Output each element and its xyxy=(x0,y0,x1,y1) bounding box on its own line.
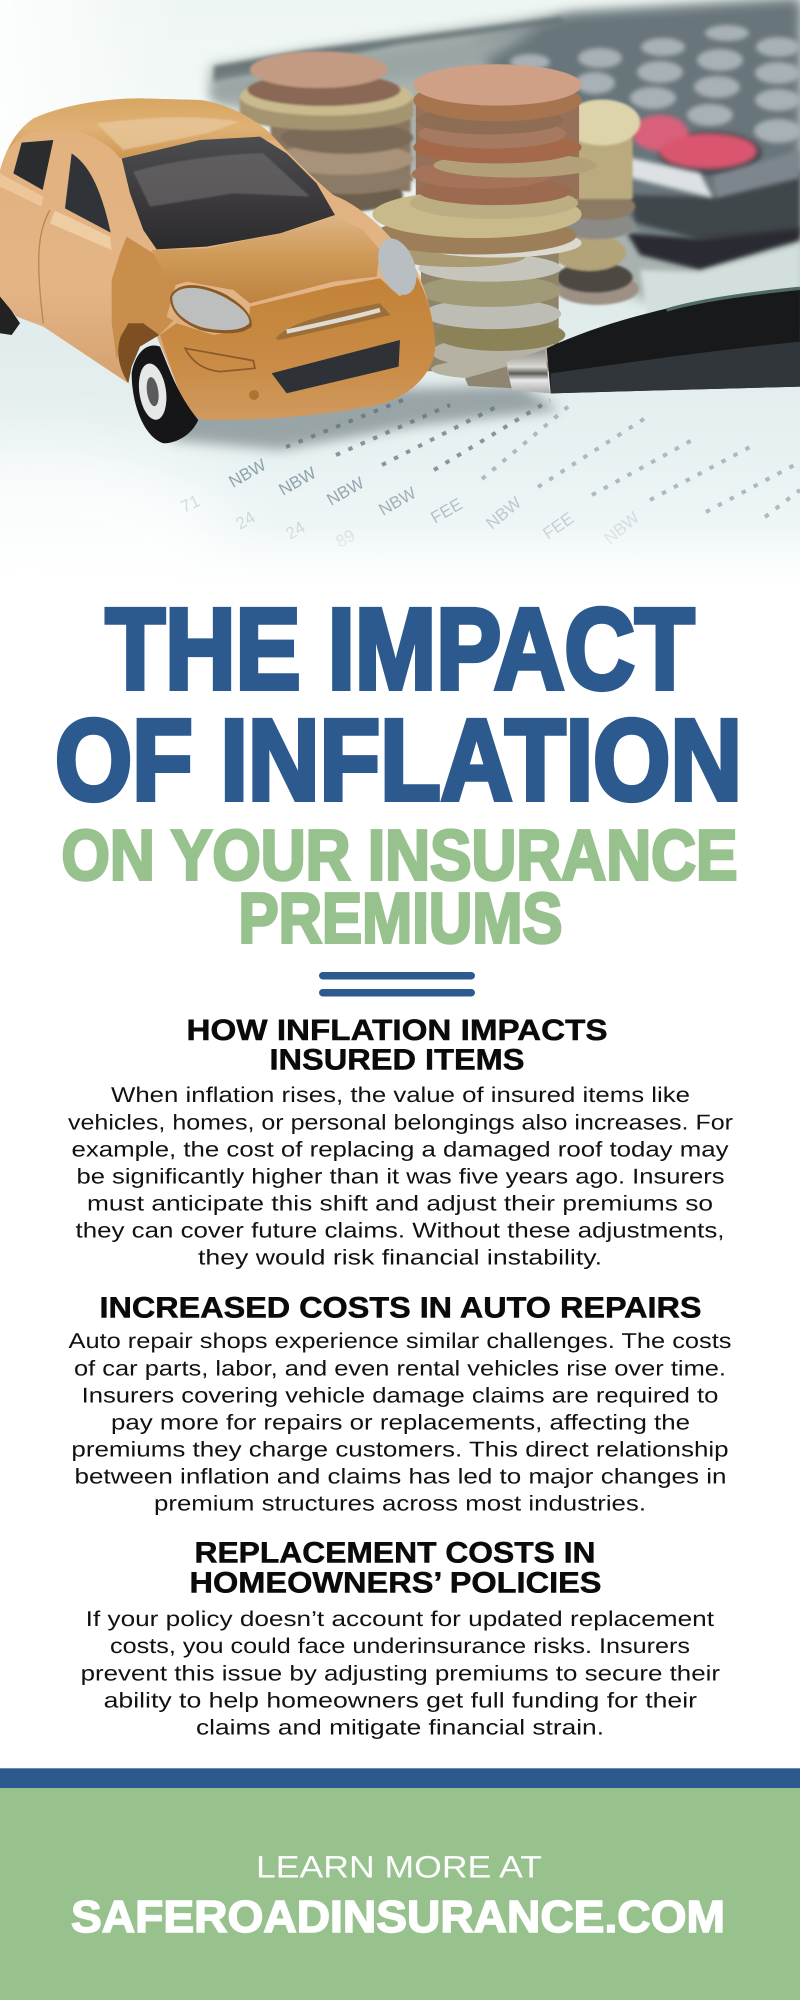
body text: increased costs in auto repairs: of car parts, labor, and even rental vehicles rise over time. xyxy=(74,1356,726,1380)
car windshield xyxy=(122,137,335,249)
coins: back right stack xyxy=(553,100,640,305)
car front wheel xyxy=(132,345,198,443)
body text: replacement costs in homeowners' policies: costs, you could face underinsurance risks. Insurers xyxy=(110,1634,690,1658)
body text: how inflation impacts insured items xyxy=(68,1083,733,1270)
paper shading and printed rows xyxy=(0,0,800,630)
body text: increased costs in auto repairs xyxy=(68,1329,732,1516)
body text: increased costs in auto repairs: premium structures across most industries. xyxy=(154,1492,646,1516)
car body xyxy=(0,98,435,420)
paper shading and printed rows: NBW xyxy=(376,483,419,519)
body text: how inflation impacts insured items: they would risk financial instability. xyxy=(198,1246,602,1270)
paper shading and printed rows: NBW xyxy=(226,455,269,491)
body text: increased costs in auto repairs: premiums they charge customers. This direct relationship xyxy=(71,1437,729,1461)
calculator red keys xyxy=(632,115,762,175)
section heading: How inflation impacts insured items: INSURED ITEMS xyxy=(270,1044,524,1076)
coins: back left stack xyxy=(240,51,413,212)
car front fender xyxy=(112,237,177,360)
footer panel: call to action xyxy=(0,1788,800,2000)
car rear wheel xyxy=(0,293,20,335)
body text: replacement costs in homeowners' policies: If your policy doesn’t account for updated replacement xyxy=(86,1607,714,1631)
photo: toy car, coins, calculator and pen on a bank statement xyxy=(0,0,800,552)
footer accent band xyxy=(0,1768,800,1788)
coins: front stack xyxy=(372,64,597,379)
paper shading and printed rows: NBW xyxy=(482,493,525,533)
car roof xyxy=(8,98,277,158)
footer text: website: SAFEROADINSURANCE.COM xyxy=(71,1891,725,1942)
body text: increased costs in auto repairs: Auto repair shops experience similar challenges. The costs xyxy=(68,1329,732,1353)
body text: how inflation impacts insured items: When inflation rises, the value of insured items like xyxy=(111,1083,690,1107)
body text: replacement costs in homeowners' policies: claims and mitigate financial strain. xyxy=(196,1716,604,1740)
toy car xyxy=(0,98,435,443)
paper shading and printed rows: FEE xyxy=(428,494,466,527)
section heading: How inflation impacts insured items: HOW INFLATION IMPACTS xyxy=(186,1014,608,1047)
paper shading and printed rows: 71 xyxy=(178,491,203,517)
car hood xyxy=(152,217,380,303)
footer text: learn more at: LEARN MORE AT xyxy=(256,1850,542,1885)
section heading: Replacement costs in homeowners' policies: HOMEOWNERS’ POLICIES xyxy=(190,1567,602,1600)
paper shading and printed rows: 24 xyxy=(232,508,258,533)
paper shading and printed rows: 24 xyxy=(282,518,308,543)
car headlights xyxy=(170,285,252,333)
body text: increased costs in auto repairs: between inflation and claims has led to major changes in xyxy=(74,1464,726,1488)
section heading: Increased costs in auto repairs: INCREASED COSTS IN AUTO REPAIRS xyxy=(100,1292,702,1325)
paper shading and printed rows: NBW xyxy=(600,508,643,548)
body text: increased costs in auto repairs: pay more for repairs or replacements, affecting the xyxy=(111,1410,690,1434)
body text: how inflation impacts insured items: must anticipate this shift and adjust their premiums so xyxy=(87,1191,713,1215)
title: The Impact of Inflation: THE IMPACT xyxy=(106,586,694,714)
car side windows xyxy=(65,153,111,233)
photo bottom fade xyxy=(217,534,800,585)
body text: how inflation impacts insured items: be significantly higher than it was five years ago. Insurers xyxy=(76,1164,724,1188)
divider: double rule xyxy=(319,972,475,996)
paper shading and printed rows: NBW xyxy=(324,473,367,509)
title: The Impact of Inflation xyxy=(55,586,742,824)
body text: how inflation impacts insured items: example, the cost of replacing a damaged roof today may xyxy=(72,1137,729,1161)
body text: replacement costs in homeowners' policies: prevent this issue by adjusting premiums to secure their xyxy=(81,1661,720,1685)
body text: increased costs in auto repairs: Insurers covering vehicle damage claims are required to xyxy=(82,1383,718,1407)
section heading: How inflation impacts insured items xyxy=(186,1014,608,1076)
car chrome trim xyxy=(276,303,391,340)
subtitle: On Your Insurance Premiums: PREMIUMS xyxy=(238,880,562,958)
paper shading and printed rows: NBW xyxy=(276,463,319,499)
body text: how inflation impacts insured items: vehicles, homes, or personal belongings also increases. For xyxy=(68,1110,733,1134)
car grille xyxy=(272,340,400,393)
section heading: Replacement costs in homeowners' policies: REPLACEMENT COSTS IN xyxy=(194,1537,596,1570)
desk and calculator xyxy=(210,0,800,330)
pen xyxy=(465,288,800,393)
section heading: Replacement costs in homeowners' policies xyxy=(190,1537,602,1600)
paper shading and printed rows: FEE xyxy=(539,509,577,543)
body text: replacement costs in homeowners' policies: ability to help homeowners get full funding for their xyxy=(104,1688,697,1712)
body text: replacement costs in homeowners' policies xyxy=(81,1607,720,1740)
subtitle: On Your Insurance Premiums xyxy=(62,816,738,958)
body text: how inflation impacts insured items: they can cover future claims. Without these adjustments, xyxy=(76,1218,724,1242)
paper shading and printed rows: 89 xyxy=(332,526,358,551)
car front face xyxy=(160,277,435,420)
